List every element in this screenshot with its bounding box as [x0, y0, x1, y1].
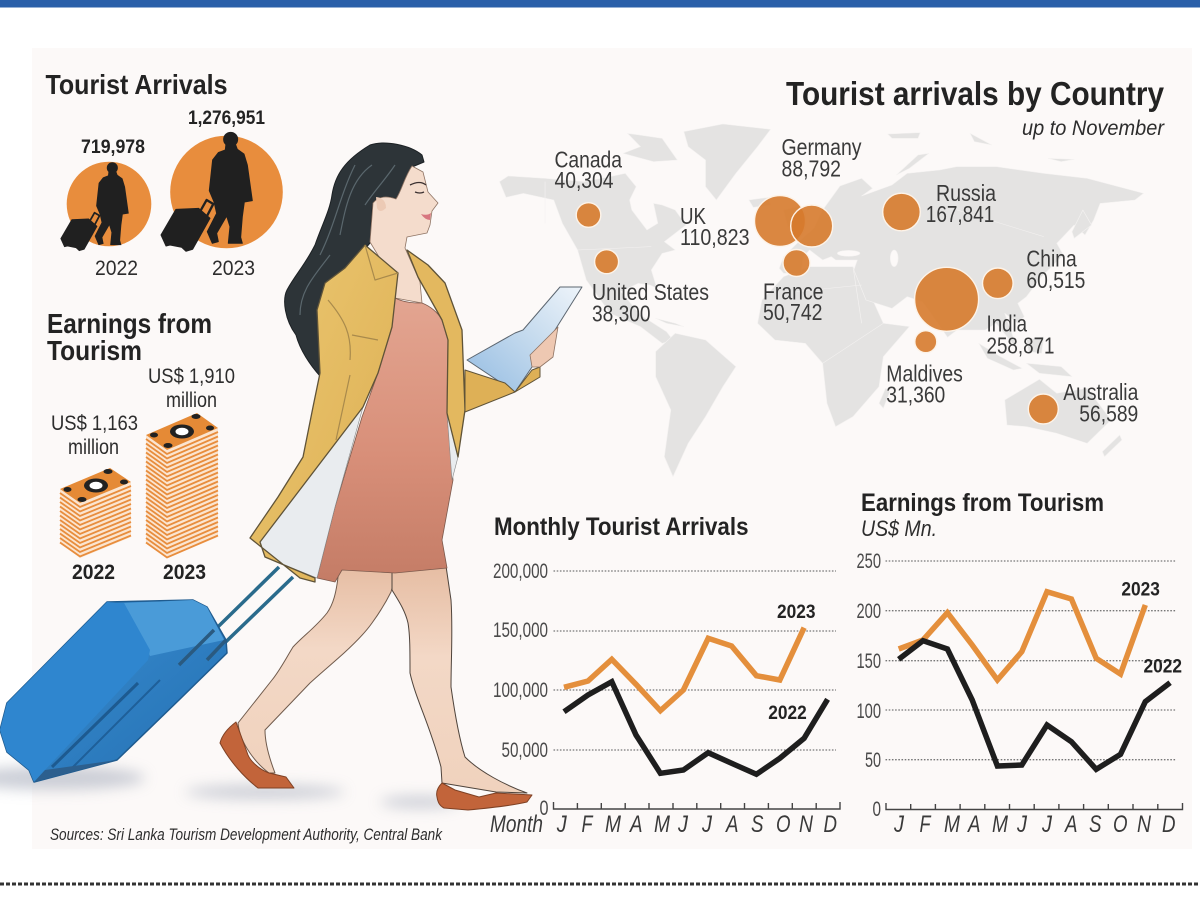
line chart: monthly tourist arrivals — [490, 513, 840, 838]
y axis labels: 100,000 — [493, 679, 548, 702]
y axis labels: 200 — [856, 600, 881, 623]
coat folds — [328, 245, 398, 440]
series 2023 — [564, 628, 804, 711]
month labels: A — [724, 811, 738, 838]
map: world landmasses — [500, 124, 1144, 477]
marker: Maldives: Maldives — [886, 361, 963, 387]
year label 2023: 2023 — [163, 561, 206, 584]
month labels: Month — [490, 811, 543, 838]
heading: Tourist arrivals by Country: Tourist arrivals by Country — [786, 75, 1165, 112]
label 2023: 2023 — [1121, 579, 1160, 601]
month labels — [893, 811, 1176, 838]
heading: Earnings from Tourism: Earnings from — [47, 308, 212, 339]
face and neck — [370, 166, 438, 303]
marker: Australia — [1028, 379, 1138, 427]
marker: United States: United States — [592, 279, 709, 305]
line chart: earnings from tourism — [856, 489, 1182, 838]
y axis labels: 50 — [865, 749, 881, 772]
month labels: D — [1162, 811, 1176, 838]
marker: Australia: 56,589 — [1079, 401, 1138, 427]
coat right panel — [407, 250, 465, 457]
month labels: J — [556, 811, 568, 838]
month labels: A — [966, 811, 980, 838]
y axis labels: 250 — [856, 550, 881, 573]
marker: Canada: 40,304 — [554, 167, 614, 193]
series 2022 — [564, 682, 828, 774]
month labels: S — [751, 811, 764, 838]
month labels: J — [893, 811, 905, 838]
label 2022: 2022 — [1144, 656, 1182, 678]
x axis — [886, 803, 1182, 810]
heading: Monthly Tourist Arrivals — [494, 513, 748, 541]
month labels: N — [799, 811, 814, 838]
label 2023: 2023 — [777, 601, 816, 623]
hair highlights — [300, 165, 395, 315]
value 2023: 1,276,951 — [188, 107, 265, 129]
hair — [285, 143, 424, 376]
gridlines — [886, 561, 1176, 760]
marker: Russia: 167,841 — [926, 201, 994, 227]
illustration: woman pulling suitcase — [0, 143, 582, 810]
marker: Germany: 88,792 — [782, 156, 841, 182]
marker: Germany — [782, 134, 862, 247]
dress — [317, 298, 453, 582]
year label 2022: 2022 — [95, 257, 138, 280]
month labels: J — [701, 811, 713, 838]
value 2022: 719,978 — [81, 136, 145, 158]
month labels: O — [776, 811, 790, 838]
month labels: A — [628, 811, 642, 838]
month labels: J — [1041, 811, 1053, 838]
suitcase — [0, 600, 227, 782]
y axis labels: 100 — [856, 700, 881, 723]
month labels: N — [1137, 811, 1152, 838]
map sheet — [467, 287, 582, 392]
marker: China: 60,515 — [1026, 267, 1085, 293]
heading: Earnings from Tourism — [861, 489, 1104, 517]
marker: France: 50,742 — [763, 299, 822, 325]
heading: Tourist Arrivals: Tourist Arrivals — [46, 69, 228, 100]
back shoe — [220, 722, 294, 788]
y axis labels: 0 — [540, 797, 548, 820]
year label 2023: 2023 — [212, 257, 255, 280]
marker: India: India — [986, 311, 1027, 337]
marker: China: China — [1026, 246, 1077, 272]
y axis labels — [493, 560, 548, 820]
subheading: up to November: up to November — [1022, 117, 1165, 140]
marker: United States — [592, 250, 709, 327]
y axis labels: 150 — [856, 650, 881, 673]
marker: India: 258,871 — [986, 332, 1054, 358]
marker: France — [763, 250, 824, 325]
hand — [530, 327, 558, 367]
marker: Russia — [883, 180, 996, 231]
heading: Earnings from Tourism: Tourism — [47, 335, 142, 366]
sleeve — [465, 367, 540, 412]
top bar — [0, 0, 1200, 8]
marker: Germany: Germany — [782, 134, 862, 160]
bottom dotted rule — [0, 882, 1200, 886]
gridlines — [554, 571, 836, 750]
marker: Maldives — [886, 331, 963, 408]
value 2022: million — [68, 436, 119, 459]
marker: Canada: Canada — [554, 147, 622, 173]
marker: United States: 38,300 — [592, 301, 650, 327]
month labels: S — [1089, 811, 1102, 838]
label 2022: 2022 — [768, 702, 807, 724]
icon: 2023 traveller circle — [161, 132, 283, 251]
marker: Russia: Russia — [936, 180, 996, 206]
y axis labels: 200,000 — [493, 560, 548, 583]
source line: Sources: Sri Lanka Tourism Development Authority, Central Bank — [50, 825, 443, 844]
month labels: D — [824, 811, 837, 838]
month labels: F — [920, 811, 931, 838]
y axis labels: 150,000 — [493, 619, 548, 642]
icon: 2022 money stack — [60, 468, 131, 558]
marker: Maldives: 31,360 — [886, 382, 945, 408]
value 2023: US$ 1,910 — [148, 365, 235, 388]
month labels: M — [992, 811, 1008, 838]
month labels: O — [1113, 811, 1128, 838]
coat — [250, 245, 398, 582]
coat lining — [260, 407, 458, 578]
month labels: J — [677, 811, 689, 838]
month labels: M — [605, 811, 621, 838]
facial features — [376, 182, 431, 220]
panel: earnings from tourism totals — [47, 308, 235, 584]
value 2022: US$ 1,163 — [51, 412, 138, 435]
marker: Australia: Australia — [1063, 379, 1138, 405]
y axis labels: 50,000 — [502, 739, 548, 762]
x axis — [554, 802, 840, 809]
marker: India — [915, 267, 1054, 358]
front leg — [392, 566, 527, 793]
y axis labels: 0 — [872, 798, 881, 821]
icon: 2023 money stack — [146, 413, 218, 558]
y axis labels — [856, 550, 881, 821]
front shoe — [437, 783, 532, 810]
marker: Canada — [554, 147, 622, 227]
suitcase handle — [179, 567, 293, 665]
series 2022 — [899, 641, 1170, 769]
month labels: M — [944, 811, 960, 838]
year label 2022: 2022 — [72, 561, 115, 584]
marker: UK: UK — [680, 203, 707, 229]
month labels — [490, 811, 837, 838]
marker: China — [982, 246, 1085, 299]
panel: tourist arrivals — [46, 69, 283, 280]
series 2023 — [899, 592, 1145, 680]
month labels: J — [1016, 811, 1028, 838]
value 2023: million — [166, 389, 217, 412]
ground shadow — [0, 766, 460, 808]
month labels: F — [582, 811, 593, 838]
month labels: A — [1063, 811, 1078, 838]
back leg — [238, 566, 398, 773]
world map panel — [500, 75, 1165, 477]
marker: UK: 110,823 — [680, 224, 750, 250]
unit label: US$ Mn. — [861, 516, 937, 541]
marker: France: France — [763, 278, 824, 304]
icon: 2022 traveller circle — [61, 162, 151, 251]
month labels: M — [654, 811, 670, 838]
marker: UK — [680, 196, 806, 250]
